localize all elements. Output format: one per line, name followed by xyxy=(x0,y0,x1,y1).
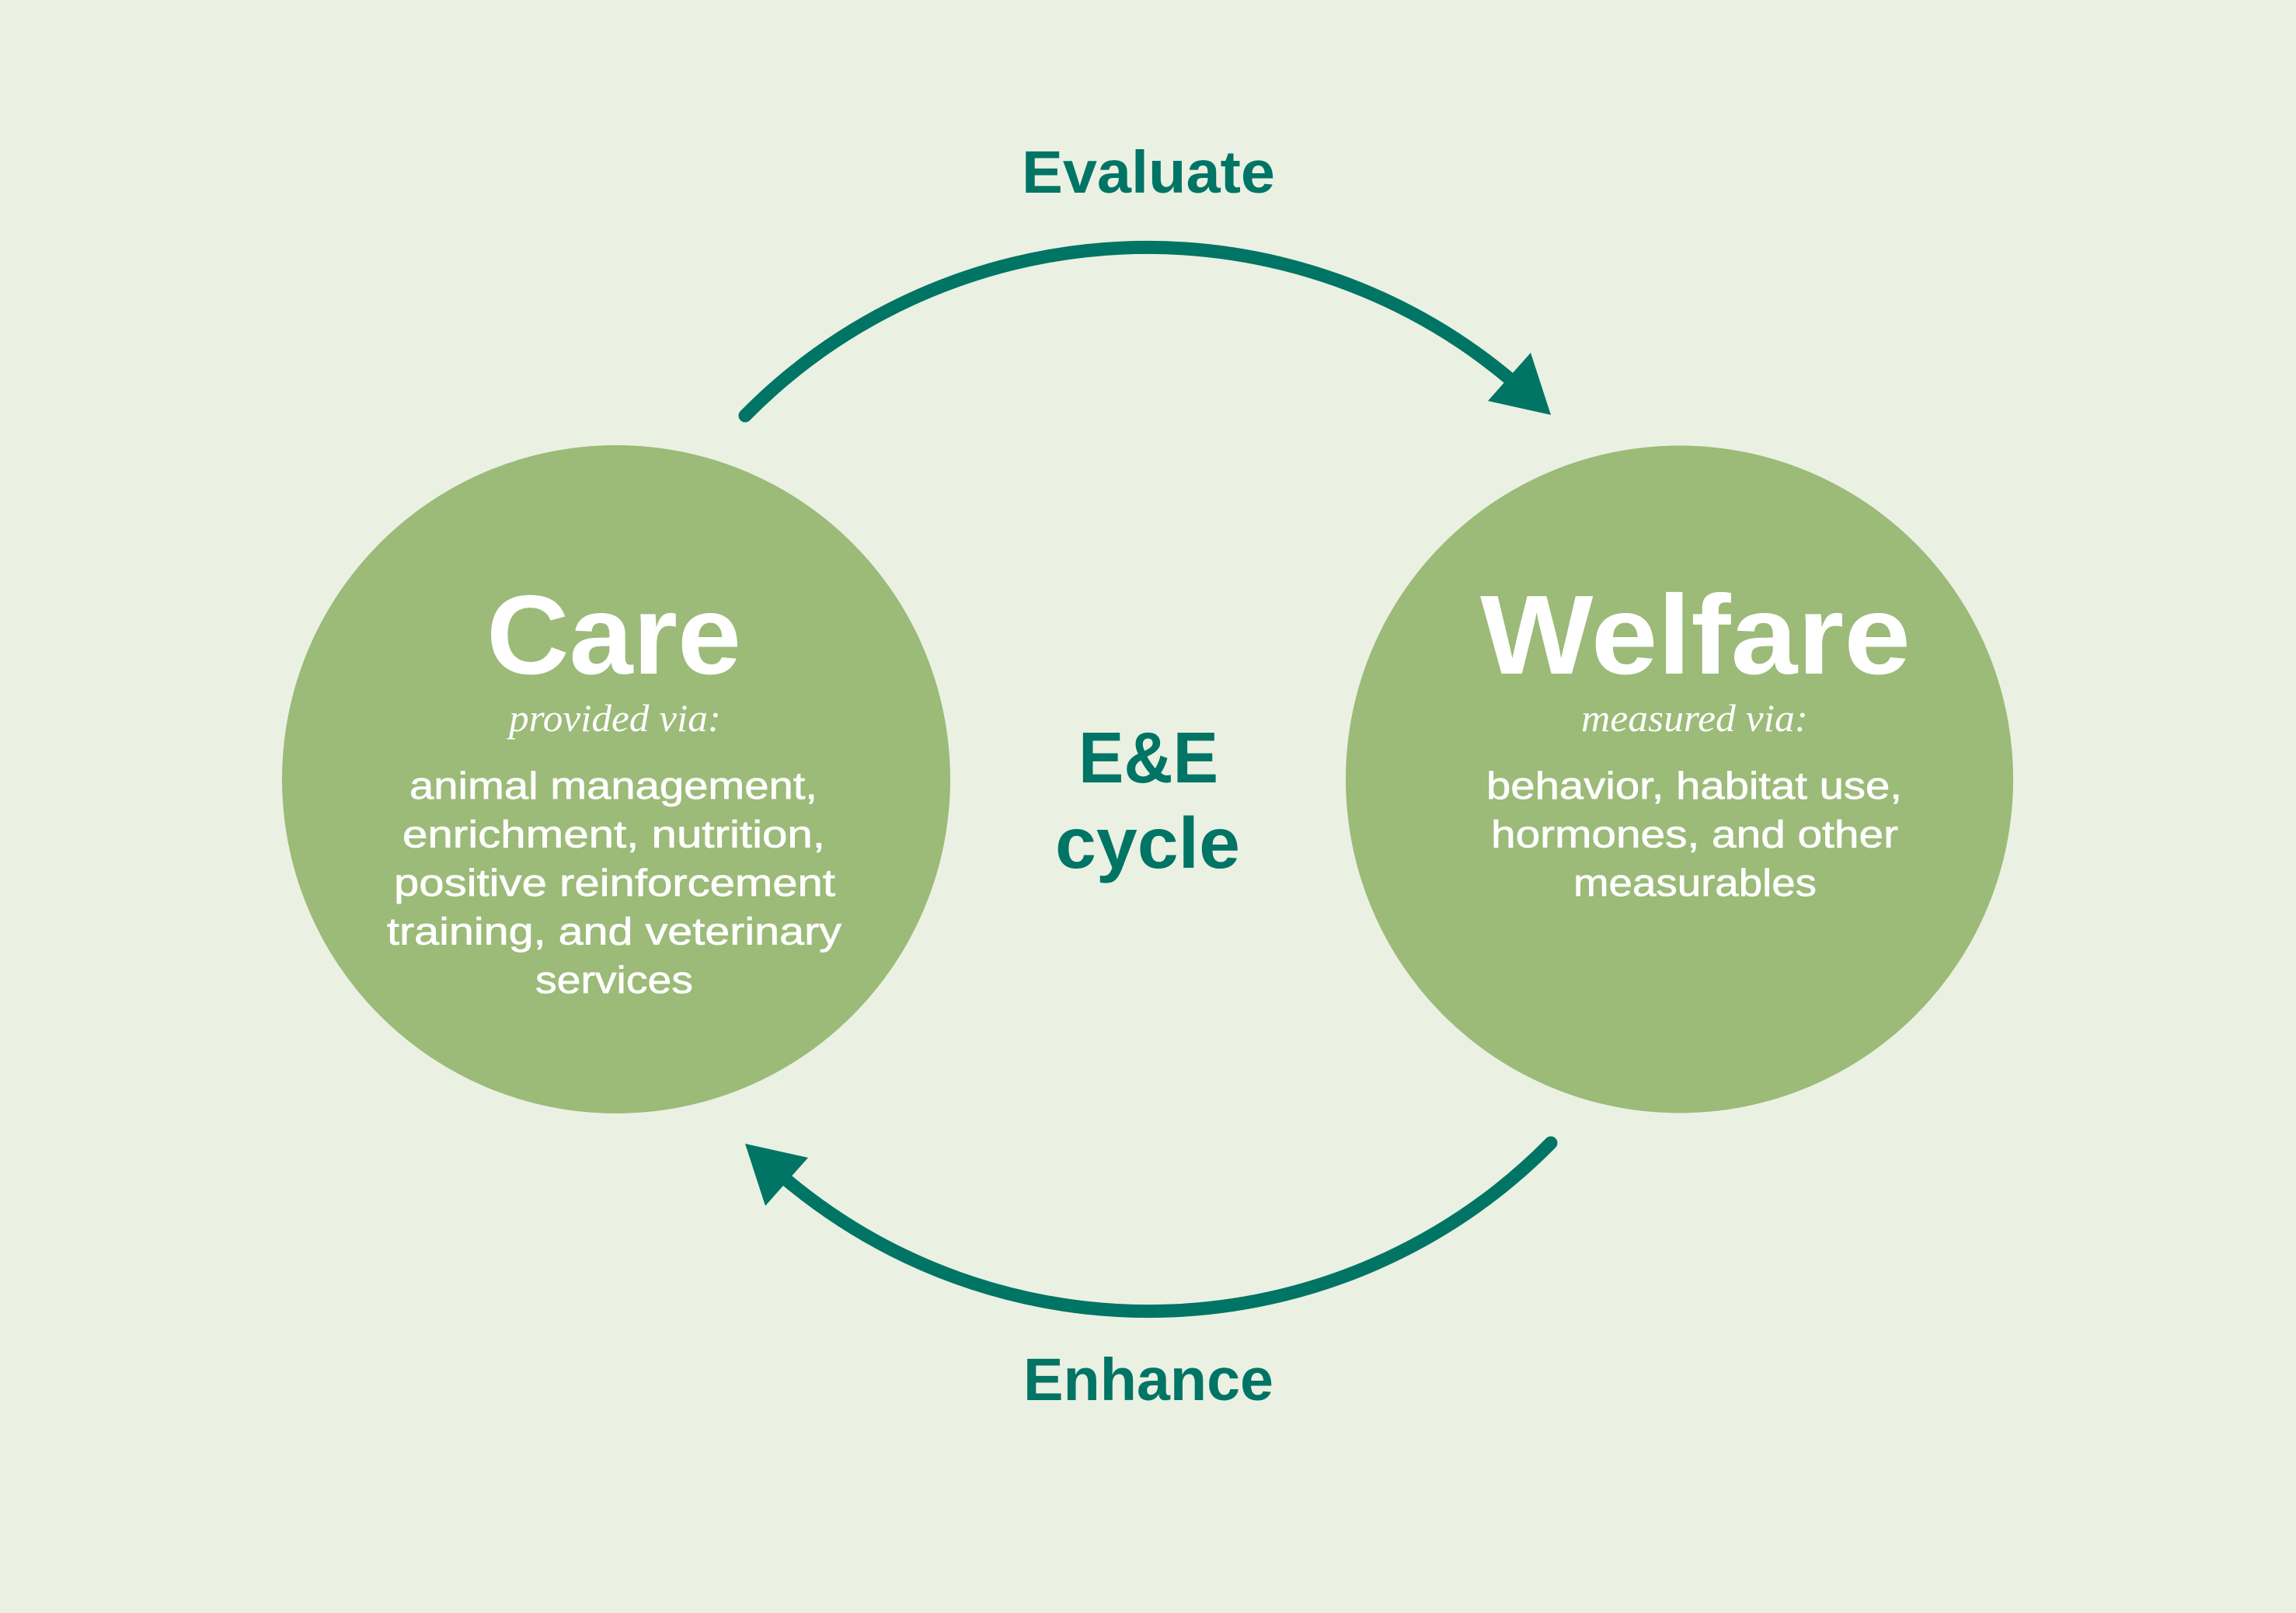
center label: E&E cycle: E&E xyxy=(1078,717,1218,798)
text block: care methods: animal management, xyxy=(409,765,817,807)
text block: welfare measures: measurables xyxy=(1573,862,1817,904)
center label: E&E cycle: cycle xyxy=(1055,803,1240,883)
arrow: evaluate, care to welfare xyxy=(745,247,1551,416)
text block: care methods: services xyxy=(535,960,693,1002)
heading: Welfare: Welfare xyxy=(1480,572,1911,698)
text block: care methods: positive reinforcement xyxy=(394,862,835,904)
panel: welfare circle xyxy=(1346,446,2013,1113)
text block: welfare measures: hormones, and other xyxy=(1491,814,1898,856)
text block: welfare measures: behavior, habitat use, xyxy=(1486,765,1902,807)
arrow: enhance, welfare to care xyxy=(745,1143,1551,1312)
heading: Care: Care xyxy=(486,572,741,698)
label: Evaluate: Evaluate xyxy=(1022,139,1275,206)
text block: care methods: enrichment, nutrition, xyxy=(402,814,825,856)
panel: care circle xyxy=(282,445,950,1113)
subheading: measured via: measured via: xyxy=(1581,696,1808,740)
text block: welfare measures xyxy=(1486,765,1902,904)
label: Enhance: Enhance xyxy=(1023,1346,1273,1413)
subheading: provided via: provided via: xyxy=(507,696,721,740)
text block: care methods xyxy=(387,765,842,1002)
text block: care methods: training, and veterinary xyxy=(387,911,842,953)
center label: E&E cycle xyxy=(1055,717,1240,883)
